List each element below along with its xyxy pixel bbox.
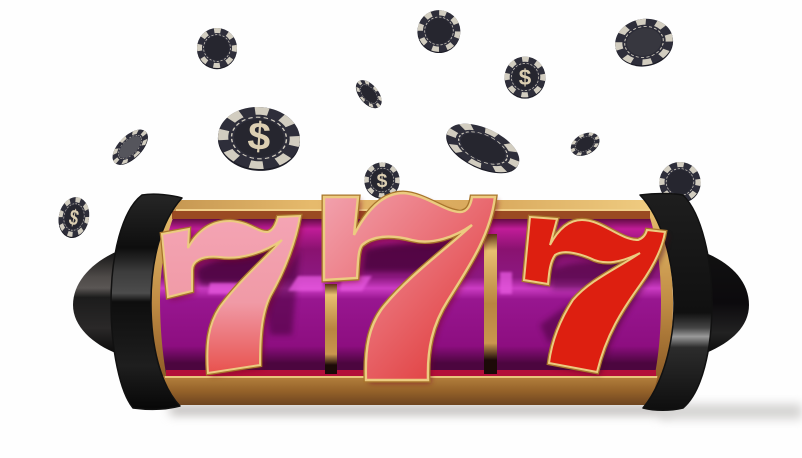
reel top lip <box>172 211 650 219</box>
chip 4 <box>505 57 545 99</box>
reel highlights <box>208 272 512 294</box>
reel body <box>149 200 673 405</box>
poker chips <box>55 7 701 241</box>
chip 7 <box>107 124 154 171</box>
middle seven <box>324 193 498 383</box>
gold casing <box>149 200 673 405</box>
chip 5 <box>351 76 387 113</box>
left end nose <box>73 251 118 354</box>
chip 11 <box>659 162 701 203</box>
right end nose <box>706 253 749 353</box>
left seven <box>162 216 303 376</box>
chip 3 <box>611 14 677 71</box>
right black ring <box>640 194 712 410</box>
chip 6 <box>216 104 302 174</box>
reel shadows <box>196 232 640 345</box>
chip 12: $ <box>67 205 81 231</box>
chip 9 <box>567 128 603 160</box>
gold divider right <box>484 234 497 374</box>
left black ring <box>111 194 182 409</box>
floor shadow <box>170 404 802 419</box>
chip 2 <box>414 7 464 56</box>
top gold edge <box>176 209 650 211</box>
chip 4: $ <box>519 65 532 90</box>
reel bottom lip <box>166 370 656 377</box>
top gold rail <box>164 200 656 211</box>
chip 10 <box>364 162 400 199</box>
chip 1 <box>197 28 237 69</box>
chip 12 <box>55 194 93 241</box>
right seven <box>524 217 668 375</box>
gold divider left <box>325 284 337 374</box>
chip 6: $ <box>246 115 272 159</box>
chip 8 <box>439 114 527 183</box>
bottom gold rail <box>163 376 658 405</box>
magenta reels <box>160 218 661 374</box>
chip 10: $ <box>377 170 388 192</box>
bottom gold edge <box>165 376 657 378</box>
